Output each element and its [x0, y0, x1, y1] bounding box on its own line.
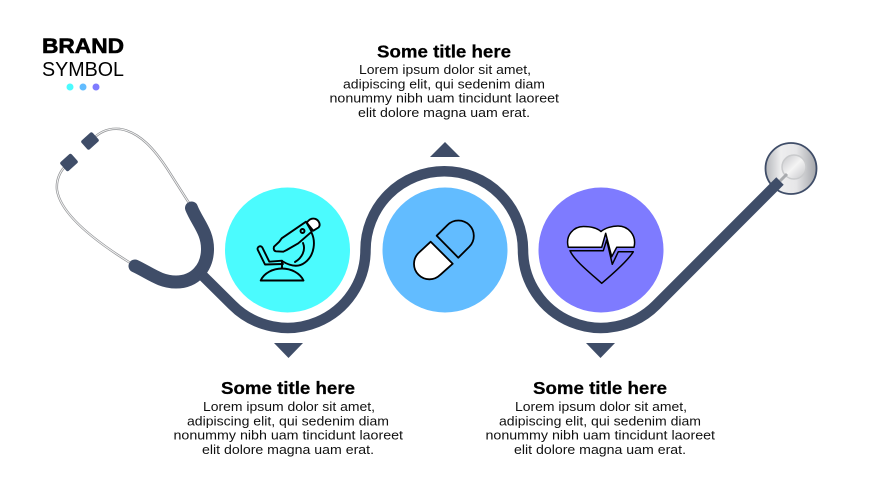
text block: bottom right: Some title here — [533, 378, 667, 398]
text block: top: elit dolore magna uam erat. — [358, 105, 530, 120]
arrow: bottom right — [586, 343, 615, 358]
text block: bottom right: elit dolore magna uam erat. — [514, 442, 686, 457]
text block: top: Lorem ipsum dolor sit amet, — [359, 62, 531, 77]
circle: heart — [538, 188, 664, 312]
text block: bottom left: Lorem ipsum dolor sit amet, — [203, 399, 375, 414]
circle: pill — [382, 188, 508, 312]
text block: top — [330, 42, 559, 120]
stethoscope chest piece — [766, 143, 816, 194]
text block: bottom right: adipiscing elit, qui sedenim diam — [499, 414, 701, 428]
text block: bottom left: nonummy nibh uam tincidunt laoreet — [174, 428, 403, 442]
arrow: top — [430, 142, 460, 157]
icon: pill — [414, 220, 474, 279]
left ear tip — [59, 153, 79, 172]
text block: bottom right: Lorem ipsum dolor sit amet, — [515, 399, 687, 414]
brand symbol: SYMBOL — [42, 58, 124, 81]
brand symbol: BRAND — [42, 35, 124, 58]
text block: top: nonummy nibh uam tincidunt laoreet — [330, 90, 559, 106]
text block: bottom right — [486, 378, 715, 457]
text block: bottom left: elit dolore magna uam erat. — [202, 442, 374, 457]
circle: microscope — [225, 188, 350, 312]
arrow: bottom left — [274, 343, 303, 358]
brand symbol — [42, 35, 124, 90]
right ear tip — [80, 132, 100, 150]
text block: bottom right: nonummy nibh uam tincidunt laoreet — [486, 428, 715, 442]
stethoscope tube wave — [201, 171, 780, 328]
text block: bottom left: Some title here — [221, 378, 355, 398]
text block: top: adipiscing elit, qui sedenim diam — [343, 76, 545, 92]
icon: heart with pulse — [568, 226, 635, 283]
icon: microscope — [258, 219, 320, 280]
text block: top: Some title here — [377, 42, 511, 62]
stethoscope Y-branch — [135, 208, 208, 282]
text block: bottom left — [174, 378, 403, 457]
stethoscope binaural tubes — [57, 129, 191, 264]
text block: bottom left: adipiscing elit, qui sedenim diam — [187, 414, 389, 428]
